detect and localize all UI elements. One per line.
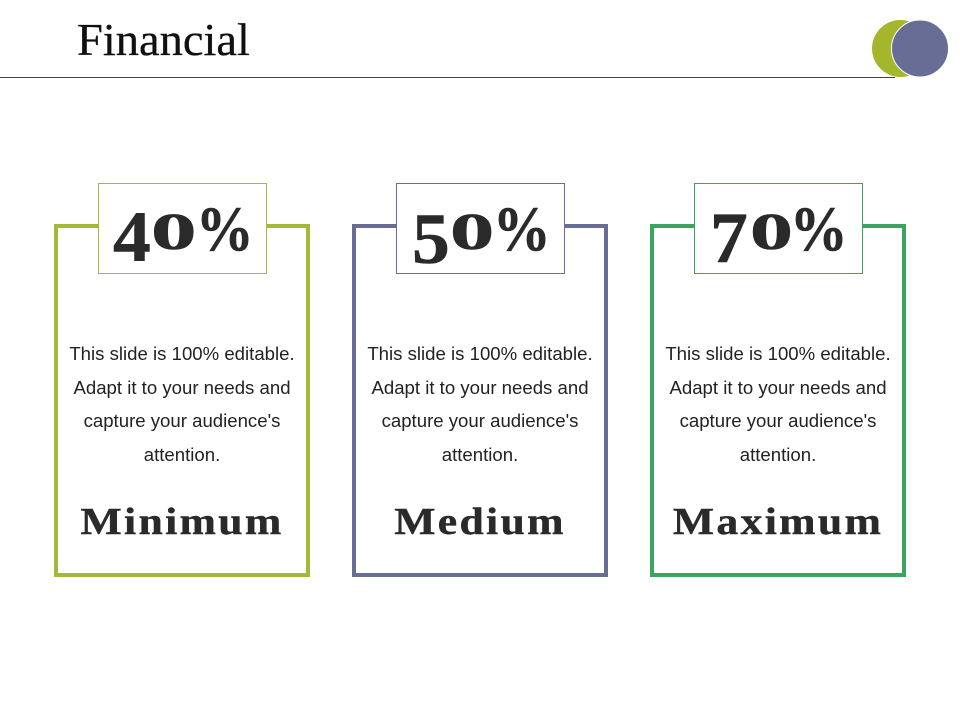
label: Maximum bbox=[673, 501, 883, 543]
stat: 50% bbox=[396, 183, 565, 274]
description: capture your audience's bbox=[84, 410, 280, 431]
stat: 50%: % bbox=[493, 193, 551, 264]
stat: 40%: % bbox=[196, 193, 254, 264]
panel: medium bbox=[352, 224, 608, 577]
description: attention. bbox=[740, 444, 816, 465]
title: Financial bbox=[77, 14, 250, 65]
panel: minimum bbox=[54, 224, 310, 577]
description bbox=[665, 343, 891, 465]
description: This slide is 100% editable. bbox=[69, 343, 295, 364]
description: Adapt it to your needs and bbox=[371, 377, 589, 398]
description: capture your audience's bbox=[680, 410, 876, 431]
stat: 50%: 0 bbox=[450, 204, 494, 261]
description: Adapt it to your needs and bbox=[73, 377, 291, 398]
description: attention. bbox=[442, 444, 518, 465]
stat: 40%: 4 bbox=[113, 197, 151, 277]
header rule bbox=[0, 77, 895, 78]
stat: 40% bbox=[98, 183, 267, 274]
icon: overlapping circles bbox=[872, 20, 948, 77]
description bbox=[69, 343, 295, 465]
stat: 50%: 5 bbox=[412, 199, 450, 279]
stat: 70%: % bbox=[790, 193, 848, 264]
description: This slide is 100% editable. bbox=[367, 343, 593, 364]
description: Adapt it to your needs and bbox=[669, 377, 887, 398]
stat: 70%: 0 bbox=[750, 204, 793, 261]
panel: maximum bbox=[650, 224, 906, 577]
description bbox=[367, 343, 593, 465]
description: attention. bbox=[144, 444, 220, 465]
label: Minimum bbox=[80, 501, 284, 543]
stat: 40%: 0 bbox=[151, 204, 196, 261]
stat: 70%: 7 bbox=[710, 198, 748, 278]
description: capture your audience's bbox=[382, 410, 578, 431]
description: This slide is 100% editable. bbox=[665, 343, 891, 364]
stat: 70% bbox=[694, 183, 863, 274]
label: Medium bbox=[394, 501, 566, 543]
